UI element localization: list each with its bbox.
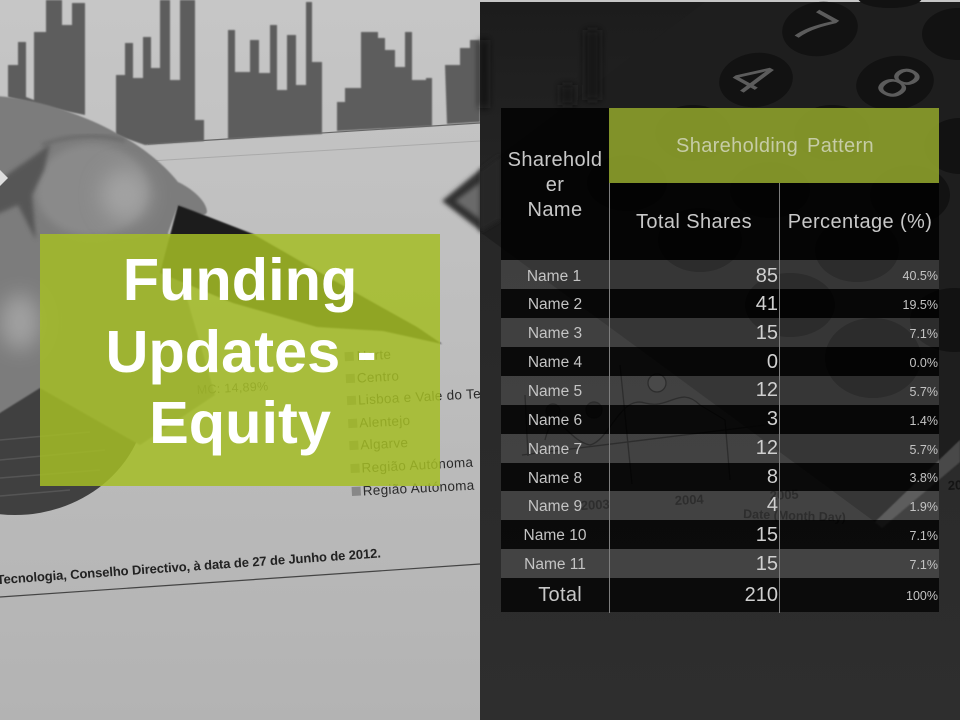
row: Name 2: 41 [756, 293, 778, 315]
table [501, 108, 939, 613]
faint axis labels in dark photo: 2004 [674, 491, 705, 508]
row: Name 7: 12 [756, 437, 778, 459]
title text: Equity [149, 389, 331, 456]
faint chart bars in dark photo [480, 30, 600, 108]
chart legend in photo: Norte [356, 347, 392, 364]
row: Name 11 [501, 549, 939, 578]
pie label in photo: MC: 14,89% [196, 379, 269, 397]
table header: shareholding pattern: Shareholding Pattern [676, 135, 874, 157]
row: Name 4: 0.0% [910, 356, 938, 370]
dark pie chart in photo [0, 275, 147, 515]
row: Total: 210 [745, 584, 778, 606]
row: Name 11: 7.1% [910, 558, 938, 572]
row: Name 11: Name 11 [524, 556, 586, 573]
row: Name 3: 15 [756, 322, 778, 344]
bar chart in photo [8, 0, 480, 145]
faint axis labels in dark photo [580, 477, 960, 525]
row: Name 6: 3 [767, 408, 778, 430]
panel: dark right photo overlay [480, 0, 960, 720]
table header: shareholding pattern [609, 108, 939, 183]
title panel [40, 234, 440, 486]
chart legend in photo: Centro [356, 368, 400, 386]
row: Name 3: 7.1% [910, 327, 938, 341]
row: Name 9: 4 [767, 494, 778, 516]
chart legend in photo: Lisboa e Vale do Tejo [358, 386, 492, 408]
row: Name 10 [501, 520, 939, 549]
row: Name 2: Name 2 [528, 296, 582, 313]
calculator key digits: 8 [862, 58, 936, 108]
row: Name 10: 15 [756, 524, 778, 546]
row: Name 5 [501, 376, 939, 405]
chart legend in photo: Alentejo [359, 413, 411, 431]
chart legend in photo: Região Autónoma [362, 478, 475, 498]
row: Name 6: 1.4% [910, 414, 938, 428]
row: Name 2 [501, 289, 939, 318]
row: Name 10: Name 10 [524, 527, 587, 544]
row: Name 5: 5.7% [910, 385, 938, 399]
chart legend in photo: Algarve [360, 435, 409, 453]
pen in photo [160, 205, 442, 344]
calculator key digits: 7 [777, 2, 851, 52]
row: Name 7: Name 7 [528, 441, 582, 458]
title text [105, 246, 377, 456]
table header: shareholder name: er [546, 174, 564, 196]
row: Name 9: 1.9% [910, 500, 938, 514]
calculator body [480, 2, 960, 522]
row: Name 9: Name 9 [528, 498, 582, 515]
faint axis labels in dark photo: 2005 [769, 487, 799, 503]
row: Total: 100% [906, 589, 938, 603]
calculator corner outside panel [442, 168, 482, 232]
row: Total [501, 578, 939, 612]
row: Name 9 [501, 491, 939, 520]
table header: total shares [609, 183, 779, 260]
calculator key digits: 4 [715, 53, 789, 103]
title text: Funding [123, 246, 357, 313]
faint axis labels in dark photo: Date (Month Day) [743, 507, 846, 525]
row: Name 3 [501, 318, 939, 347]
title text: Updates - [105, 318, 377, 385]
table header: shareholder name [501, 108, 609, 260]
row: Name 4 [501, 347, 939, 376]
row: Name 5: 12 [756, 379, 778, 401]
chart legend in photo: Região Autónoma [361, 455, 474, 475]
faint line graph in dark photo [522, 365, 765, 484]
table header: percentage [779, 183, 939, 260]
hand in photo [0, 96, 215, 445]
row: Name 1 [501, 260, 939, 289]
row: Name 4: 0 [767, 351, 778, 373]
footnote in photo: Tecnologia, Conselho Directivo, à data de 27 de Junho de 2012. [0, 545, 381, 587]
row: Total: Total [538, 584, 582, 606]
row: Name 8: 3.8% [910, 471, 938, 485]
row: Name 1: 85 [756, 265, 778, 287]
row: Name 10: 7.1% [910, 529, 938, 543]
row: Name 7: 5.7% [910, 443, 938, 457]
faint axis labels in dark photo: 2003 [580, 497, 610, 513]
calculator key digits [715, 2, 936, 108]
row: Name 2: 19.5% [903, 298, 938, 312]
chart legend in photo [344, 342, 497, 499]
row: Name 11: 15 [756, 553, 778, 575]
table header: percentage: Percentage (%) [788, 211, 932, 233]
table header: shareholder name: Sharehold [508, 149, 602, 171]
row: Name 8: Name 8 [528, 470, 582, 487]
calculator keys [587, 0, 960, 398]
row: Name 6 [501, 405, 939, 434]
row: Name 7 [501, 434, 939, 463]
row: Name 6: Name 6 [528, 412, 582, 429]
row: Name 4: Name 4 [528, 354, 583, 371]
row: Name 5: Name 5 [528, 383, 582, 400]
row: Name 3: Name 3 [528, 325, 582, 342]
row: Name 1: Name 1 [527, 268, 581, 285]
page text in photo [0, 342, 497, 587]
row: Name 8: 8 [767, 466, 778, 488]
row: Name 8 [501, 463, 939, 491]
table header: total shares: Total Shares [636, 211, 752, 233]
row: Name 1: 40.5% [903, 269, 938, 283]
table header: shareholder name: Name [528, 199, 582, 221]
